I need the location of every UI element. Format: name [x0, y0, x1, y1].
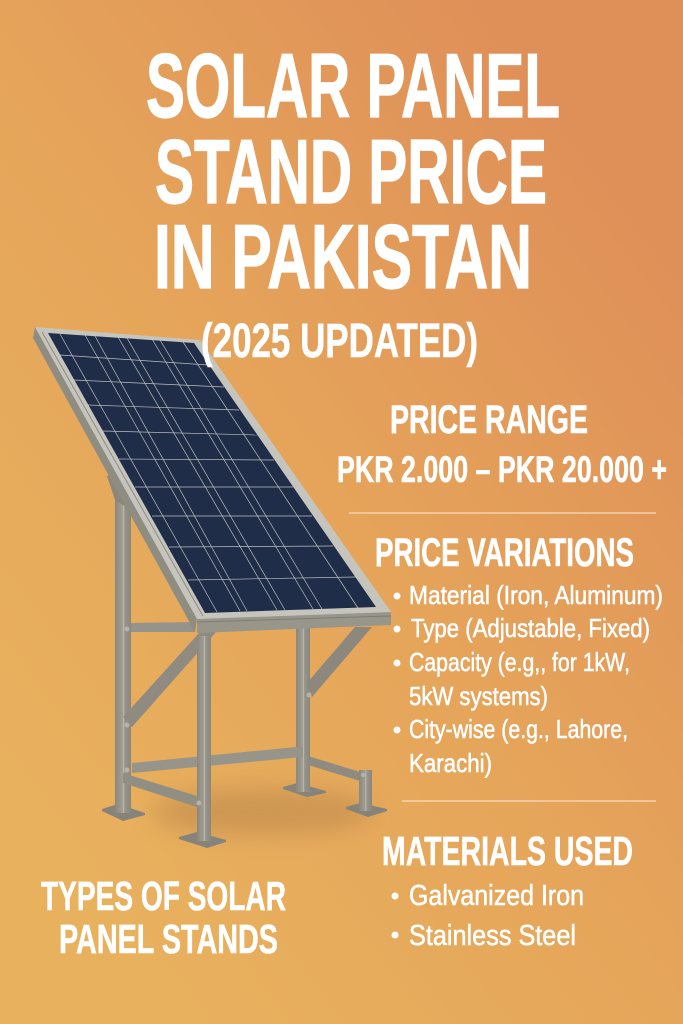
heading: price range: PRICE RANGE — [390, 398, 588, 442]
leg top bracket — [107, 474, 135, 510]
short rear post foot — [346, 803, 387, 817]
side lower brace — [123, 773, 200, 808]
subtitle: 2025 updated: (2025 UPDATED) — [201, 315, 478, 368]
bolts — [124, 626, 365, 806]
rear lower brace — [305, 755, 360, 781]
back right foot — [283, 783, 326, 797]
heading: types of solar panel stands — [41, 873, 286, 962]
rear crossbar — [132, 747, 303, 773]
title — [146, 36, 560, 308]
left diagonal brace — [123, 632, 216, 727]
section: price variations — [375, 531, 663, 778]
back left foot — [102, 804, 145, 821]
bullet list: materials: Stainless Steel — [409, 920, 576, 952]
ground shadow — [152, 788, 372, 836]
bullet list: price variations: 5kW systems) — [409, 681, 548, 711]
section: price range — [337, 398, 667, 490]
heading: types of solar panel stands: TYPES OF SOLAR — [41, 873, 286, 919]
bullet list: price variations: City-wise (e.g., Lahore, — [409, 714, 628, 744]
illustration: solar panel on stand — [33, 327, 391, 848]
bullet list: materials: Galvanized Iron — [409, 880, 584, 912]
right diagonal brace — [307, 627, 372, 697]
front foot — [179, 832, 226, 848]
heading: types of solar panel stands: PANEL STANDS — [59, 916, 278, 962]
stand frame — [102, 474, 387, 848]
solar panel — [33, 327, 391, 633]
bullet list: price variations: Type (Adjustable, Fixed) — [411, 613, 650, 643]
bullet list: materials — [392, 880, 584, 952]
bullet list: price variations: Capacity (e.g,, for 1kW, — [409, 647, 630, 677]
photovoltaic cells — [48, 333, 376, 613]
back right leg — [296, 625, 310, 792]
bullet list: price variations: Karachi) — [409, 748, 492, 778]
back left leg — [115, 498, 131, 813]
short rear post — [359, 770, 372, 811]
panel frame — [33, 327, 391, 633]
top left crossbar — [131, 622, 195, 632]
bullet list: price variations — [394, 580, 663, 778]
section: materials used — [382, 828, 633, 952]
cell grid lines — [60, 334, 358, 612]
front leg — [197, 636, 211, 841]
